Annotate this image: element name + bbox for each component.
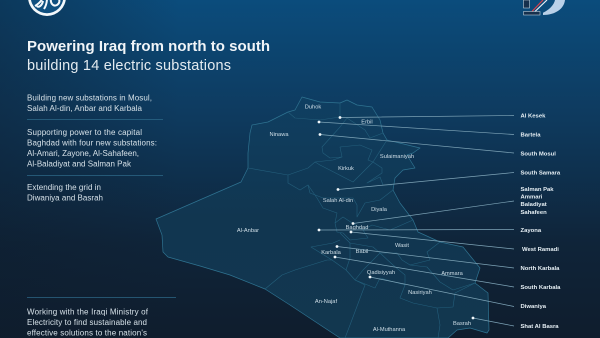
text block: extending the grid xyxy=(27,183,103,202)
substation labels: Ammari xyxy=(520,194,543,200)
title: building 14 electric substations xyxy=(27,58,231,74)
substation labels xyxy=(520,114,561,330)
substation labels: Bartela xyxy=(520,132,541,138)
province labels: Al-Muthanna xyxy=(373,327,406,333)
province labels: Qadisiyyah xyxy=(367,270,395,276)
substation labels: Diwaniya xyxy=(520,304,547,310)
substation labels: Zayona xyxy=(520,228,542,234)
province labels: An-Najaf xyxy=(315,299,337,305)
province labels: Salah Al-din xyxy=(323,198,353,204)
text block: extending the grid: Extending the grid in xyxy=(27,183,101,192)
text block: Baghdad support: Baghdad with four new substations: xyxy=(27,138,157,148)
province labels: Basrah xyxy=(453,321,471,327)
province labels xyxy=(237,104,471,333)
icon: GE logo xyxy=(28,0,66,16)
province labels: Kirkuk xyxy=(338,166,354,172)
province borders xyxy=(248,103,475,338)
substation labels: South Samara xyxy=(520,170,561,176)
title: Powering Iraq from north to south xyxy=(27,38,270,55)
substation labels: Al Kesek xyxy=(520,114,546,120)
text block: Baghdad support: Al-Baladiyat and Salman Pak xyxy=(27,160,132,168)
substation labels: Salman Pak xyxy=(520,187,554,193)
province labels: Duhok xyxy=(305,104,321,110)
province labels: Karbala xyxy=(321,250,342,256)
province labels: Diyala xyxy=(371,207,388,213)
title xyxy=(27,38,270,74)
province labels: Erbil xyxy=(361,120,373,126)
connector lines and substation dots xyxy=(318,116,514,326)
text block: extending the grid: Diwaniya and Basrah xyxy=(27,194,103,202)
text block: ministry: Working with the Iraqi Ministry of xyxy=(27,308,149,316)
text block: ministry: effective solutions to the nation's xyxy=(27,328,147,338)
province labels: Nasiriyah xyxy=(408,290,432,296)
substation labels: West Ramadi xyxy=(522,247,559,253)
province labels: Sulaimaniyah xyxy=(380,154,414,160)
icon: partner logo xyxy=(524,0,565,15)
text block: new substations xyxy=(27,94,152,113)
substation labels: South Mosul xyxy=(520,152,556,158)
text block: new substations: Salah Al-din, Anbar and Karbala xyxy=(27,104,143,113)
text block: new substations: Building new substations in Mosul, xyxy=(27,94,152,102)
province labels: Ammara xyxy=(441,271,464,277)
map of Iraq xyxy=(156,97,489,338)
text block: Baghdad support: Supporting power to the capital xyxy=(27,128,142,137)
province labels: Al-Anbar xyxy=(237,228,259,234)
substation labels: South Karbala xyxy=(520,285,561,291)
substation labels: North Karbala xyxy=(520,266,560,272)
text block: Baghdad support xyxy=(27,128,157,168)
text block: ministry xyxy=(27,308,149,338)
province labels: Baghdad xyxy=(346,225,368,231)
province labels: Ninawa xyxy=(270,132,289,138)
text block: Baghdad support: Al-Amari, Zayone, Al-Sahafeen, xyxy=(27,149,139,158)
substation labels: Sahafeen xyxy=(520,210,547,216)
province labels: Babil xyxy=(356,249,368,255)
province labels: Wasit xyxy=(395,243,409,249)
substation labels: Baladiyat xyxy=(520,202,547,208)
text block: ministry: Electricity to find sustainable and xyxy=(27,318,147,327)
substation labels: Shat Al Basra xyxy=(520,324,559,330)
